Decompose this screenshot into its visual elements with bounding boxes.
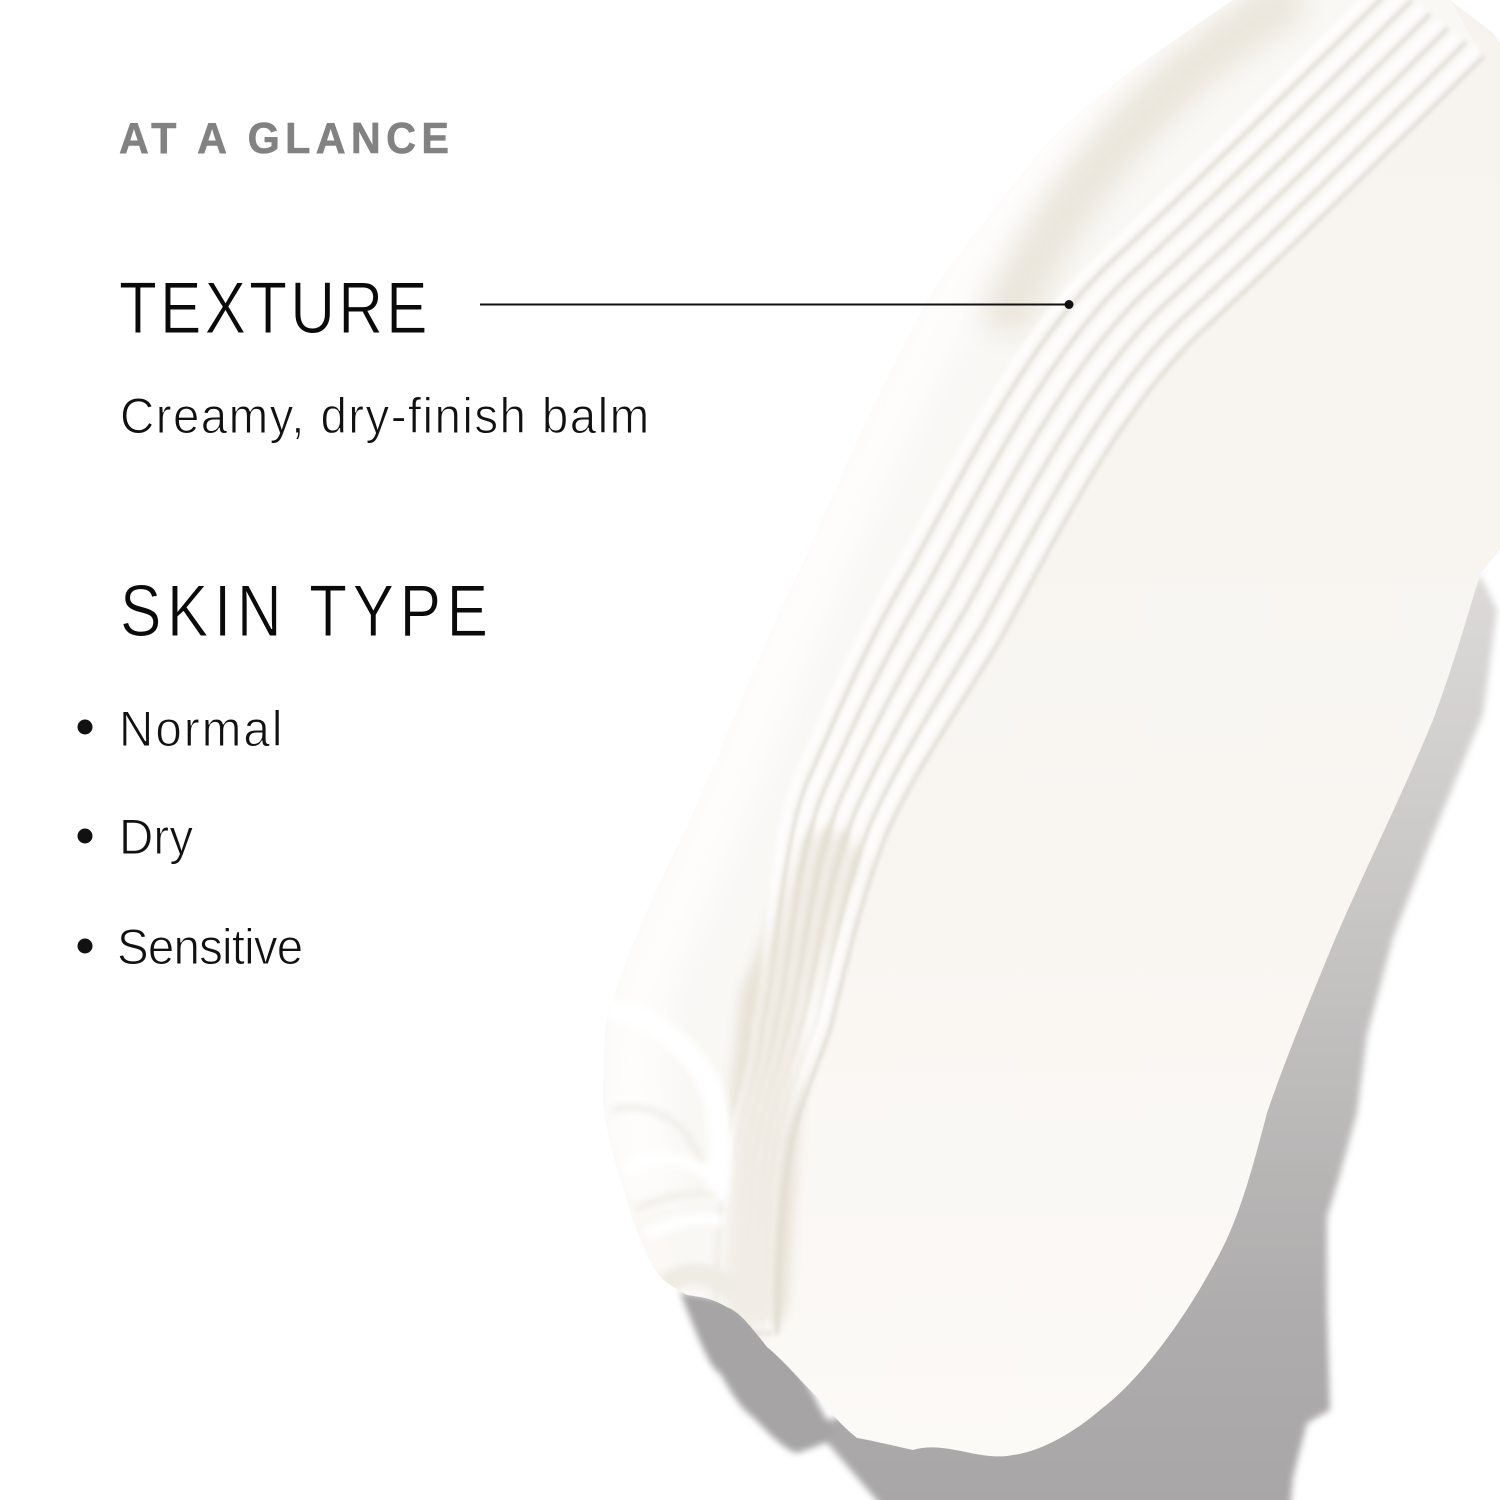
cream swatch shadow: [680, 574, 1497, 1500]
swatch ridged band: [622, 0, 1300, 1336]
swatch lower lobe waves: [614, 1033, 731, 1293]
swatch base: [590, 0, 1500, 1500]
list item: sensitive: Sensitive: [117, 920, 303, 975]
heading: texture: TEXTURE: [119, 268, 428, 349]
list item: dry: Dry: [119, 810, 194, 865]
heading: at a glance: AT A GLANCE: [119, 114, 449, 163]
text: texture description: Creamy, dry-finish balm: [120, 389, 649, 444]
callout line to swatch: [480, 300, 1074, 309]
swatch ridges: [723, 0, 1483, 1333]
list: skin types: [78, 702, 303, 975]
heading: skin type: SKIN TYPE: [120, 571, 488, 652]
list item: normal: Normal: [119, 702, 282, 757]
list item: dry: [78, 810, 194, 865]
cream swatch: [590, 0, 1500, 1500]
